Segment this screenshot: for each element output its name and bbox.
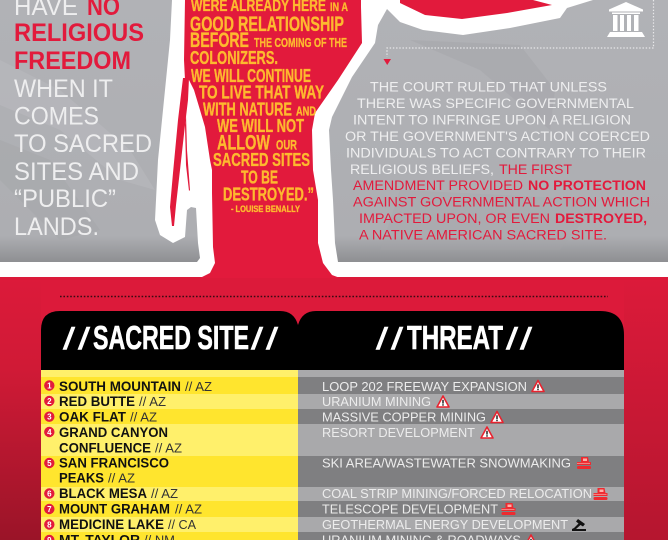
site column rows	[41, 370, 298, 540]
court ruling text: NO PROTECTION	[528, 178, 646, 193]
panel: left grey panel	[0, 0, 200, 262]
table header: threat: /	[520, 321, 533, 356]
red arm	[400, 0, 552, 19]
number badges: 7	[47, 505, 52, 514]
left statement text: WHEN IT	[14, 75, 113, 103]
court ruling text: THERE WAS SPECIFIC GOVERNMENTAL	[357, 96, 635, 111]
table header: threat: /	[391, 321, 404, 356]
site names: // AZ	[185, 379, 212, 394]
quote: IN A	[330, 0, 348, 14]
threats: COAL STRIP MINING/FORCED RELOCATION	[322, 486, 592, 501]
quote: ALLOW	[217, 132, 270, 154]
quote: SACRED SITES	[213, 150, 310, 170]
table header: threat: THREAT	[407, 319, 503, 356]
court ruling text: INTENT TO INFRINGE UPON A RELIGION	[353, 112, 631, 128]
left statement text: LANDS.	[14, 213, 99, 241]
number badges: 5	[47, 459, 52, 468]
quote: COLONIZERS.	[190, 48, 278, 68]
hair strands	[170, 78, 189, 226]
site names: OAK FLAT	[59, 410, 127, 424]
site names: // AZ	[151, 486, 178, 501]
quote: TO BE	[241, 168, 278, 188]
icon: red arrowhead	[384, 59, 391, 65]
figure: red silhouette	[170, 0, 552, 278]
number badges	[44, 380, 54, 540]
threats: LOOP 202 FREEWAY EXPANSION	[322, 379, 527, 394]
number badges: 8	[47, 520, 52, 530]
table	[41, 311, 624, 540]
quote: WE WILL NOT	[217, 116, 304, 136]
site names: // AZ	[155, 440, 182, 455]
court ruling text: AMENDMENT PROVIDED	[353, 178, 523, 193]
table header: sacred site	[41, 311, 298, 370]
table header: threat: /	[376, 321, 389, 356]
court ruling text	[345, 80, 650, 242]
site names: // AZ	[139, 394, 166, 409]
table header: sacred site: /	[251, 321, 264, 356]
threats: URANIUM MINING	[322, 394, 431, 409]
panel: right grey panel	[329, 0, 668, 262]
quote: TO LIVE THAT WAY	[199, 82, 324, 102]
quote: BEFORE	[190, 29, 249, 52]
threats: MASSIVE COPPER MINING	[322, 410, 486, 424]
left statement text: TO SACRED	[14, 130, 152, 158]
table header: sacred site: /	[63, 321, 76, 356]
court ruling text: THE COURT RULED THAT UNLESS	[370, 80, 607, 95]
site names: MEDICINE LAKE	[59, 517, 164, 532]
quote: WE WILL CONTINUE	[191, 66, 311, 86]
court ruling text: RELIGIOUS BELIEFS,	[350, 162, 494, 177]
threats: SKI AREA/WASTEWATER SNOWMAKING	[322, 456, 571, 470]
court ruling text: INDIVIDUALS TO ACT CONTRARY TO THEIR	[346, 146, 646, 160]
quote: GOOD RELATIONSHIP	[190, 13, 344, 36]
threats: TELESCOPE DEVELOPMENT	[322, 502, 498, 516]
site names: BLACK MESA	[59, 486, 147, 501]
number badges: 1	[47, 382, 52, 390]
court ruling text: IMPACTED UPON, OR EVEN	[359, 211, 550, 226]
left statement text: FREEDOM	[14, 47, 131, 75]
threats	[322, 379, 592, 540]
table header: sacred site: /	[266, 321, 279, 356]
background: white band	[0, 0, 668, 277]
court ruling text: DESTROYED,	[555, 211, 647, 226]
quote: AND	[296, 104, 316, 118]
number badges: 3	[47, 413, 52, 422]
site names: CONFLUENCE	[59, 440, 151, 455]
site names: RED BUTTE	[59, 394, 135, 409]
left statement text	[14, 0, 152, 241]
court ruling text: OR THE GOVERNMENT'S ACTION COERCED	[345, 129, 650, 144]
quote: WITH NATURE	[203, 100, 292, 120]
red lower background	[0, 277, 668, 540]
left statement text: “PUBLIC”	[14, 185, 116, 213]
site names	[59, 379, 212, 540]
number badges: 4	[47, 428, 52, 437]
quote: OUR	[276, 136, 297, 152]
court ruling text: AGAINST GOVERNMENTAL ACTION WHICH	[353, 194, 650, 210]
site names: // AZ	[175, 502, 202, 516]
threat column rows	[298, 370, 624, 540]
table header: threat: /	[506, 321, 519, 356]
divider dots	[60, 296, 608, 298]
table header: sacred site: SACRED SITE	[93, 319, 249, 356]
site names: // CA	[168, 517, 196, 532]
site names: PEAKS	[59, 471, 104, 486]
number badges: 2	[47, 397, 52, 406]
left statement text: RELIGIOUS	[14, 19, 144, 47]
quote: THE COMING OF THE	[254, 36, 347, 50]
site names: SOUTH MOUNTAIN	[59, 379, 181, 394]
site names: MOUNT GRAHAM	[59, 502, 170, 516]
court ruling text: THE FIRST	[499, 162, 572, 177]
quote: - LOUISE BENALLY	[231, 204, 301, 215]
icon: courthouse	[607, 2, 645, 37]
site names: // AZ	[130, 410, 157, 424]
table header: threat	[298, 311, 624, 370]
site names: SAN FRANCISCO	[59, 456, 169, 470]
table header: sacred site: /	[78, 321, 91, 356]
quote: DESTROYED.”	[223, 184, 314, 204]
left statement text: COMES	[14, 102, 99, 130]
dotted connector	[387, 0, 654, 57]
threats: GEOTHERMAL ENERGY DEVELOPMENT	[322, 517, 568, 532]
left statement text: SITES AND	[14, 158, 139, 186]
quote	[190, 0, 348, 215]
threats: RESORT DEVELOPMENT	[322, 425, 475, 440]
court ruling text: A NATIVE AMERICAN SACRED SITE.	[359, 228, 607, 242]
threat icons	[437, 380, 608, 540]
site names: GRAND CANYON	[59, 425, 168, 440]
site names: // AZ	[108, 471, 135, 486]
number badges: 6	[47, 490, 52, 498]
